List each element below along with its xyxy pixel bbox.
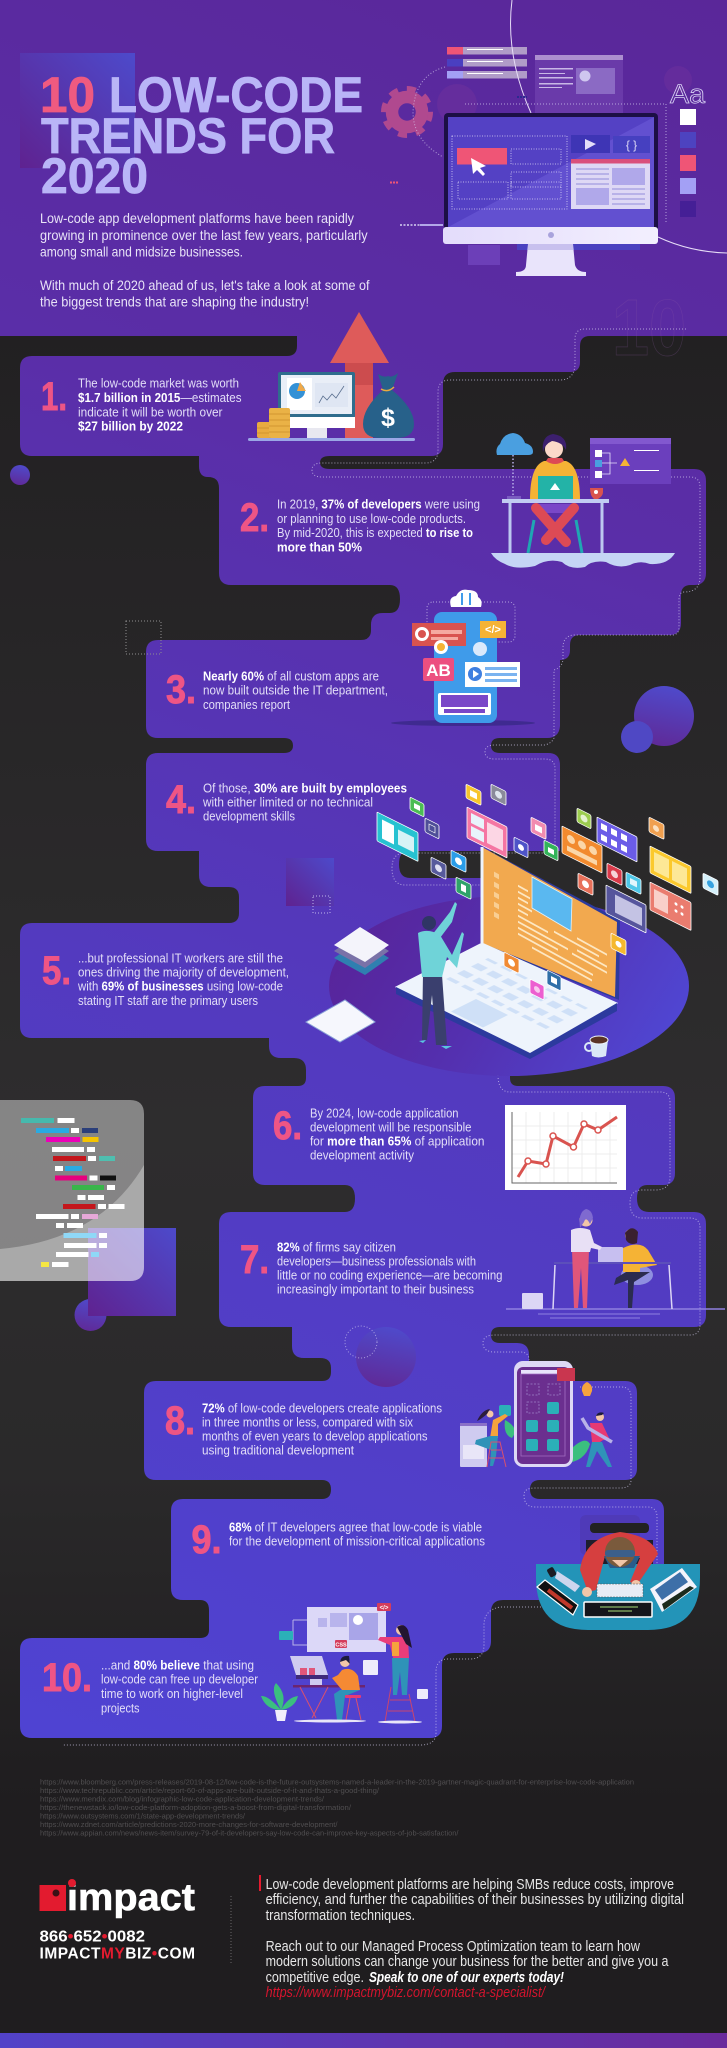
text block: 68% of IT developers agree that low-code is viable xyxy=(229,1520,482,1534)
selected block xyxy=(457,148,507,164)
text block: The low-code market was worth xyxy=(78,376,239,390)
gradient square xyxy=(88,1228,176,1316)
braces button: { } xyxy=(626,138,637,152)
main title: LOW-CODE xyxy=(109,67,363,123)
logo and contact xyxy=(40,1877,195,1962)
text block: indicate it will be worth over xyxy=(78,406,222,420)
text block xyxy=(202,1402,442,1458)
open book xyxy=(306,1000,375,1042)
dotted frame xyxy=(465,104,666,222)
text block: In 2019, 37% of developers were using xyxy=(277,498,480,512)
red accent bar xyxy=(259,1875,261,1891)
decorative gradient square xyxy=(286,858,334,906)
sources list: https://www.techrepublic.com/article/report-60-of-apps-are-built-outside-of-it-and-thats-a-good-thing/ xyxy=(40,1786,380,1795)
top menu bars xyxy=(447,47,527,78)
decorative dotted square xyxy=(313,896,330,913)
thin white curve xyxy=(511,0,727,253)
trend 1: 1. xyxy=(41,375,67,419)
main title xyxy=(40,67,363,204)
text block: low-code can free up developer xyxy=(101,1672,258,1686)
text block: development activity xyxy=(310,1148,415,1162)
laptop screen xyxy=(482,847,617,997)
laptop base edge xyxy=(396,987,617,1059)
intro text: With much of 2020 ahead of us, let's take a look at some of xyxy=(40,277,370,293)
decorative gradient circle xyxy=(356,1327,416,1387)
text block: Of those, 30% are built by employees xyxy=(203,782,407,796)
dark dots xyxy=(517,96,527,98)
screen layout dotted boxes xyxy=(452,136,567,209)
text block: for more than 65% of application xyxy=(310,1134,484,1148)
illustration: designer and developer building a page: CSS xyxy=(335,1642,347,1648)
text block: Nearly 60% of all custom apps are xyxy=(203,670,379,684)
trend 9: 9. xyxy=(192,1518,222,1562)
text block: more than 50% xyxy=(277,540,362,554)
text block: ...but professional IT workers are still the xyxy=(78,952,283,966)
trend 4: 4. xyxy=(166,778,196,822)
decorative circle xyxy=(74,1299,106,1331)
trend 5 xyxy=(42,949,289,1008)
pink dots xyxy=(390,182,398,184)
intro text: Low-code app development platforms have been rapidly xyxy=(40,210,354,226)
text block: stating IT staff are the primary users xyxy=(78,994,258,1008)
decorative circle left xyxy=(10,465,30,485)
coloured code lines xyxy=(21,1118,124,1267)
monitor xyxy=(443,113,658,276)
website: IMPACTMYBIZ•COM xyxy=(40,1946,195,1962)
intro text: among small and midsize businesses. xyxy=(40,244,243,260)
laptop screen back xyxy=(482,847,620,1000)
trend 8: 8. xyxy=(165,1399,195,1443)
illustration: isometric laptop scene with floating app cards xyxy=(306,784,718,1076)
back window xyxy=(535,55,623,123)
text block: with either limited or no technical xyxy=(202,796,373,810)
decorative dotted outline following the ribbon, upper xyxy=(312,329,700,885)
trend 6 xyxy=(273,1104,626,1190)
text block: $1.7 billion in 2015—estimates xyxy=(78,391,242,405)
dashes left of monitor xyxy=(400,224,420,226)
text block xyxy=(277,498,480,554)
trend 2 xyxy=(240,433,675,568)
text block: 82% of firms say citizen xyxy=(277,1240,396,1254)
trend 2: 2. xyxy=(240,496,269,540)
laptop base xyxy=(396,943,617,1053)
second paragraph xyxy=(266,1939,668,2001)
monitor shadows xyxy=(468,244,640,265)
second paragraph: https://www.impactmybiz.com/contact-a-specialist/ xyxy=(266,1985,547,2001)
illustration: designer and developer building a page xyxy=(261,1603,428,1724)
sources list: https://www.bloomberg.com/press-releases/2019-08-12/low-code-is-the-future-outsystems-named-a-leader-in-the-2019-gartner-magic-quadrant-for-enterprise-low-code-application xyxy=(40,1778,634,1786)
text block: ones driving the majority of development, xyxy=(78,966,289,980)
bottom gradient bar xyxy=(0,2033,727,2048)
sources list: https://www.zdnet.com/article/predictions-2020-more-changes-for-software-development/ xyxy=(40,1820,338,1829)
text block: in three months or less, compared with six xyxy=(202,1416,414,1430)
decorative dotted circle xyxy=(345,1326,377,1358)
main title: 10 xyxy=(40,67,95,123)
illustration: phone with app cards: </> xyxy=(485,624,501,636)
text block: increasingly important to their business xyxy=(277,1282,474,1296)
logo dot xyxy=(68,1879,76,1887)
coffee mug xyxy=(585,1036,608,1058)
text block xyxy=(229,1520,485,1548)
trend 3 xyxy=(166,590,535,726)
dashes right xyxy=(420,224,443,226)
decorative small circle xyxy=(621,721,653,753)
text block xyxy=(101,1658,258,1716)
icon: gear xyxy=(384,88,430,136)
first paragraph: efficiency, and further the capabilities of their businesses by utilizing digital xyxy=(266,1892,684,1908)
header illustration: gear, monitor, UI elements xyxy=(384,0,727,372)
trend 9 xyxy=(192,1515,700,1630)
text block: for the development of mission-critical applications xyxy=(229,1534,485,1548)
screen code lines xyxy=(494,872,607,990)
text block: $27 billion by 2022 xyxy=(78,420,183,434)
trend 7 xyxy=(240,1209,725,1318)
text block: development skills xyxy=(203,810,295,824)
text block: using traditional development xyxy=(202,1444,354,1458)
first paragraph: transformation techniques. xyxy=(266,1908,415,1924)
mini window xyxy=(571,159,650,209)
text block: projects xyxy=(101,1702,140,1716)
colour swatches xyxy=(680,109,696,217)
icon: faint gear xyxy=(437,84,477,124)
glass highlight xyxy=(0,1165,144,1281)
decorative dotted square xyxy=(126,621,161,654)
text block: developers—business professionals with xyxy=(277,1254,476,1268)
sources list: https://www.appian.com/news/news-item/survey-79-of-it-developers-say-low-code-can-improve-key-aspects-of-job-satisfaction/ xyxy=(40,1828,459,1838)
faint outlined 10: 10 xyxy=(612,283,686,372)
trend 8 xyxy=(165,1361,612,1467)
text block xyxy=(203,670,388,712)
trend 7: 7. xyxy=(240,1238,269,1282)
title backing gradient square xyxy=(20,53,135,168)
text block xyxy=(77,952,289,1008)
text block: By 2024, low-code application xyxy=(310,1106,458,1120)
text block: with 69% of businesses using low-code xyxy=(77,980,283,994)
trend 4 xyxy=(166,778,407,824)
intro text: growing in prominence over the last few years, particularly xyxy=(40,227,368,243)
text block: little or no coding experience—are becoming xyxy=(277,1268,502,1282)
trend 3: 3. xyxy=(166,668,196,712)
second paragraph: Reach out to our Managed Process Optimization team to learn how xyxy=(266,1939,641,1955)
screen blue card xyxy=(532,877,572,931)
sources list: https://www.mendix.com/blog/infographic-low-code-application-development-trends/ xyxy=(40,1794,325,1804)
trend 10: 10. xyxy=(42,1656,92,1700)
illustration: two colleagues at a table xyxy=(506,1209,725,1318)
code window panel with gradient square xyxy=(0,1100,176,1331)
sources list: https://www.outsystems.com/1/state-app-development-trends/ xyxy=(40,1812,246,1820)
text block: 72% of low-code developers create applications xyxy=(202,1402,442,1416)
illustration: top-down developer at desk xyxy=(536,1515,700,1630)
intro text xyxy=(40,210,370,310)
illustration: developer at desk on cloud xyxy=(491,433,675,568)
second paragraph: competitive edge. xyxy=(266,1970,364,1986)
second paragraph: modern solutions can change your business for the better and give you a xyxy=(266,1954,668,1970)
text block: time to work on higher-level xyxy=(101,1687,243,1701)
glass panel xyxy=(0,1100,144,1281)
books stack xyxy=(334,927,389,975)
text block: By mid-2020, this is expected to rise to xyxy=(277,526,473,540)
text block xyxy=(202,782,407,824)
text block: now built outside the IT department, xyxy=(203,684,388,698)
decorative large circle xyxy=(634,686,694,746)
illustration: phone app builders xyxy=(460,1361,612,1467)
trend 1 xyxy=(41,312,415,441)
closing call to action xyxy=(259,1875,684,2001)
text block xyxy=(310,1106,484,1162)
braces button xyxy=(613,136,650,153)
sources list: https://thenewstack.io/low-code-platform-adoption-gets-a-boost-from-digital-transformation/ xyxy=(40,1803,352,1812)
first paragraph xyxy=(266,1877,684,1924)
icon: cursor xyxy=(471,158,486,176)
trend 5: 5. xyxy=(42,949,71,993)
intro text: the biggest trends that are shaping the industry! xyxy=(40,294,309,310)
trend 6: 6. xyxy=(273,1104,302,1148)
text block: companies report xyxy=(203,698,290,712)
text block: development will be responsible xyxy=(310,1120,472,1134)
second paragraph: Speak to one of our experts today! xyxy=(369,1970,564,1986)
icon: faint gear near swatches xyxy=(664,66,692,94)
typography label: Aa xyxy=(670,79,706,109)
phone number: 866•652•0082 xyxy=(40,1928,145,1946)
logo square xyxy=(40,1885,66,1911)
trend 10 xyxy=(42,1603,428,1724)
plant xyxy=(261,1683,298,1721)
keyboard keys xyxy=(414,957,591,1046)
decorative dotted outline following the ribbon, lower xyxy=(63,1075,700,1745)
play button xyxy=(571,135,610,153)
illustration: phone with app cards: AB xyxy=(426,661,451,680)
logo word: impact xyxy=(67,1877,195,1919)
text block: months of even years to develop applications xyxy=(202,1430,428,1444)
line chart xyxy=(505,1105,626,1190)
text block: or planning to use low-code products. xyxy=(277,512,466,526)
text block xyxy=(277,1240,502,1296)
text block: ...and 80% believe that using xyxy=(101,1658,254,1672)
illustration: rising arrow, monitor, coins, money bag: $ xyxy=(381,404,395,432)
illustration: phone with app cards xyxy=(391,590,535,726)
person standing xyxy=(418,902,464,1049)
footer divider xyxy=(230,1896,232,1964)
main title: TRENDS FOR xyxy=(41,108,335,164)
floating app cards xyxy=(377,784,718,1000)
first paragraph: Low-code development platforms are helping SMBs reduce costs, improve xyxy=(266,1877,674,1893)
illustration: rising arrow, monitor, coins, money bag xyxy=(248,312,415,441)
text block xyxy=(78,376,242,434)
illustration: designer and developer building a page: </> xyxy=(380,1606,389,1612)
sources list xyxy=(40,1778,634,1838)
platform ellipse xyxy=(329,896,689,1076)
main title: 2020 xyxy=(41,148,148,204)
dotted arc around gear xyxy=(413,67,445,157)
